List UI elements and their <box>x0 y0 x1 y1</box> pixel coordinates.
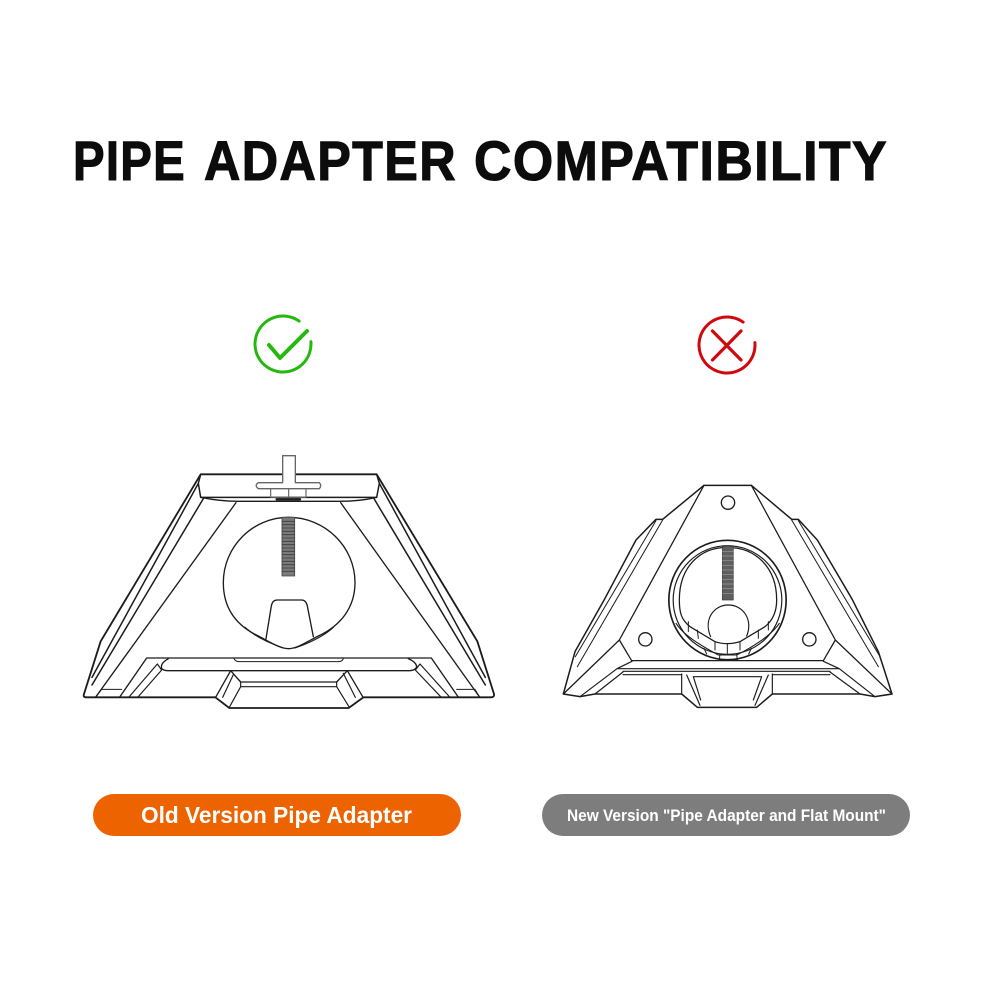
pipe hole <box>223 517 355 649</box>
saddle <box>266 600 313 641</box>
label: old version <box>93 794 461 836</box>
icon: red cross <box>699 317 755 373</box>
face edges <box>563 485 892 694</box>
label: new version: New Version "Pipe Adapter and Flat Mount" <box>567 807 886 825</box>
label: old version: Old Version Pipe Adapter <box>141 802 412 828</box>
saddle arc <box>708 605 749 637</box>
top band <box>92 474 485 685</box>
threaded bolt <box>282 517 295 576</box>
inner diagonals <box>96 503 479 697</box>
title: PIPE <box>73 130 186 192</box>
lower ledge <box>580 661 875 697</box>
title <box>73 130 888 192</box>
title: COMPATIBILITY <box>474 130 888 192</box>
icon: green check <box>255 316 311 372</box>
mounting holes <box>721 496 735 509</box>
bottom tray <box>120 658 458 697</box>
central clip <box>682 674 772 705</box>
pipe ring <box>669 540 786 660</box>
title: ADAPTER <box>204 130 457 192</box>
T bolt head <box>256 456 321 489</box>
central clip <box>216 671 363 697</box>
outer body <box>84 474 494 708</box>
label: new version <box>542 794 910 836</box>
diagram: old version pipe adapter <box>84 456 494 708</box>
outer body <box>563 485 892 707</box>
diagram: new version pipe adapter and flat mount <box>563 485 892 707</box>
threaded bolt <box>722 547 733 600</box>
